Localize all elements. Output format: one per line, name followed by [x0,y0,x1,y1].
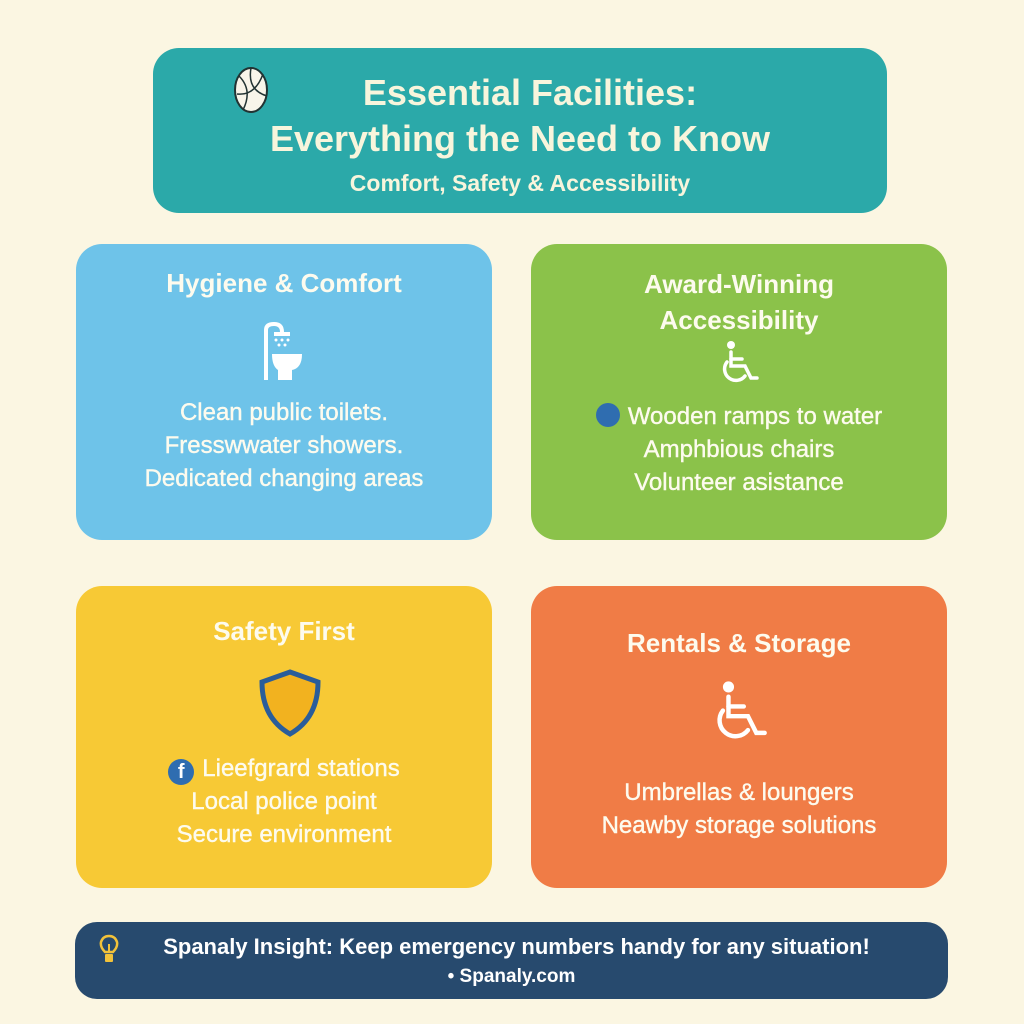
body text: Dedicated changing areas [145,465,423,492]
icon: wheelchair [717,681,767,738]
panel: rentals [531,586,947,888]
heading: Award-Winning [644,269,834,299]
source: • Spanaly.com [448,966,575,987]
body text: Volunteer asistance [634,469,844,496]
body text: Lieefgrard stations [202,755,400,782]
footer insight bar [75,922,948,999]
subtitle: Comfort, Safety & Accessibility [350,170,690,196]
icon: shower toilet [264,322,302,380]
panel: safety [76,586,492,888]
panel: accessibility [531,244,947,540]
icon: volleyball [234,67,268,113]
body text: Neawby storage solutions [602,812,876,839]
body text: Secure environment [177,821,391,848]
heading: Safety First [213,616,355,646]
icon: wheelchair [722,341,759,382]
body text [168,755,400,848]
icon: shield [260,669,320,737]
heading: Hygiene & Comfort [166,268,402,298]
body text: f [178,761,185,783]
body text [602,779,876,839]
title: Essential Facilities: [363,72,697,113]
insight text: Spanaly Insight: Keep emergency numbers handy for any situation! [163,934,870,959]
heading [644,269,834,335]
heading: Rentals & Storage [627,628,851,658]
body text [145,399,423,492]
body text: Umbrellas & loungers [624,779,854,806]
body text: Local police point [191,788,377,815]
header banner [153,48,887,213]
header banner: Everything the Need to Know [270,118,770,159]
body text: Clean public toilets. [180,399,388,426]
panel: hygiene [76,244,492,540]
body text: Wooden ramps to water [628,403,882,430]
icon: lightbulb [100,934,118,962]
body text [596,403,882,496]
body text: Amphbious chairs [644,436,834,463]
heading: Accessibility [660,305,818,335]
body text: Fresswwater showers. [165,432,403,459]
